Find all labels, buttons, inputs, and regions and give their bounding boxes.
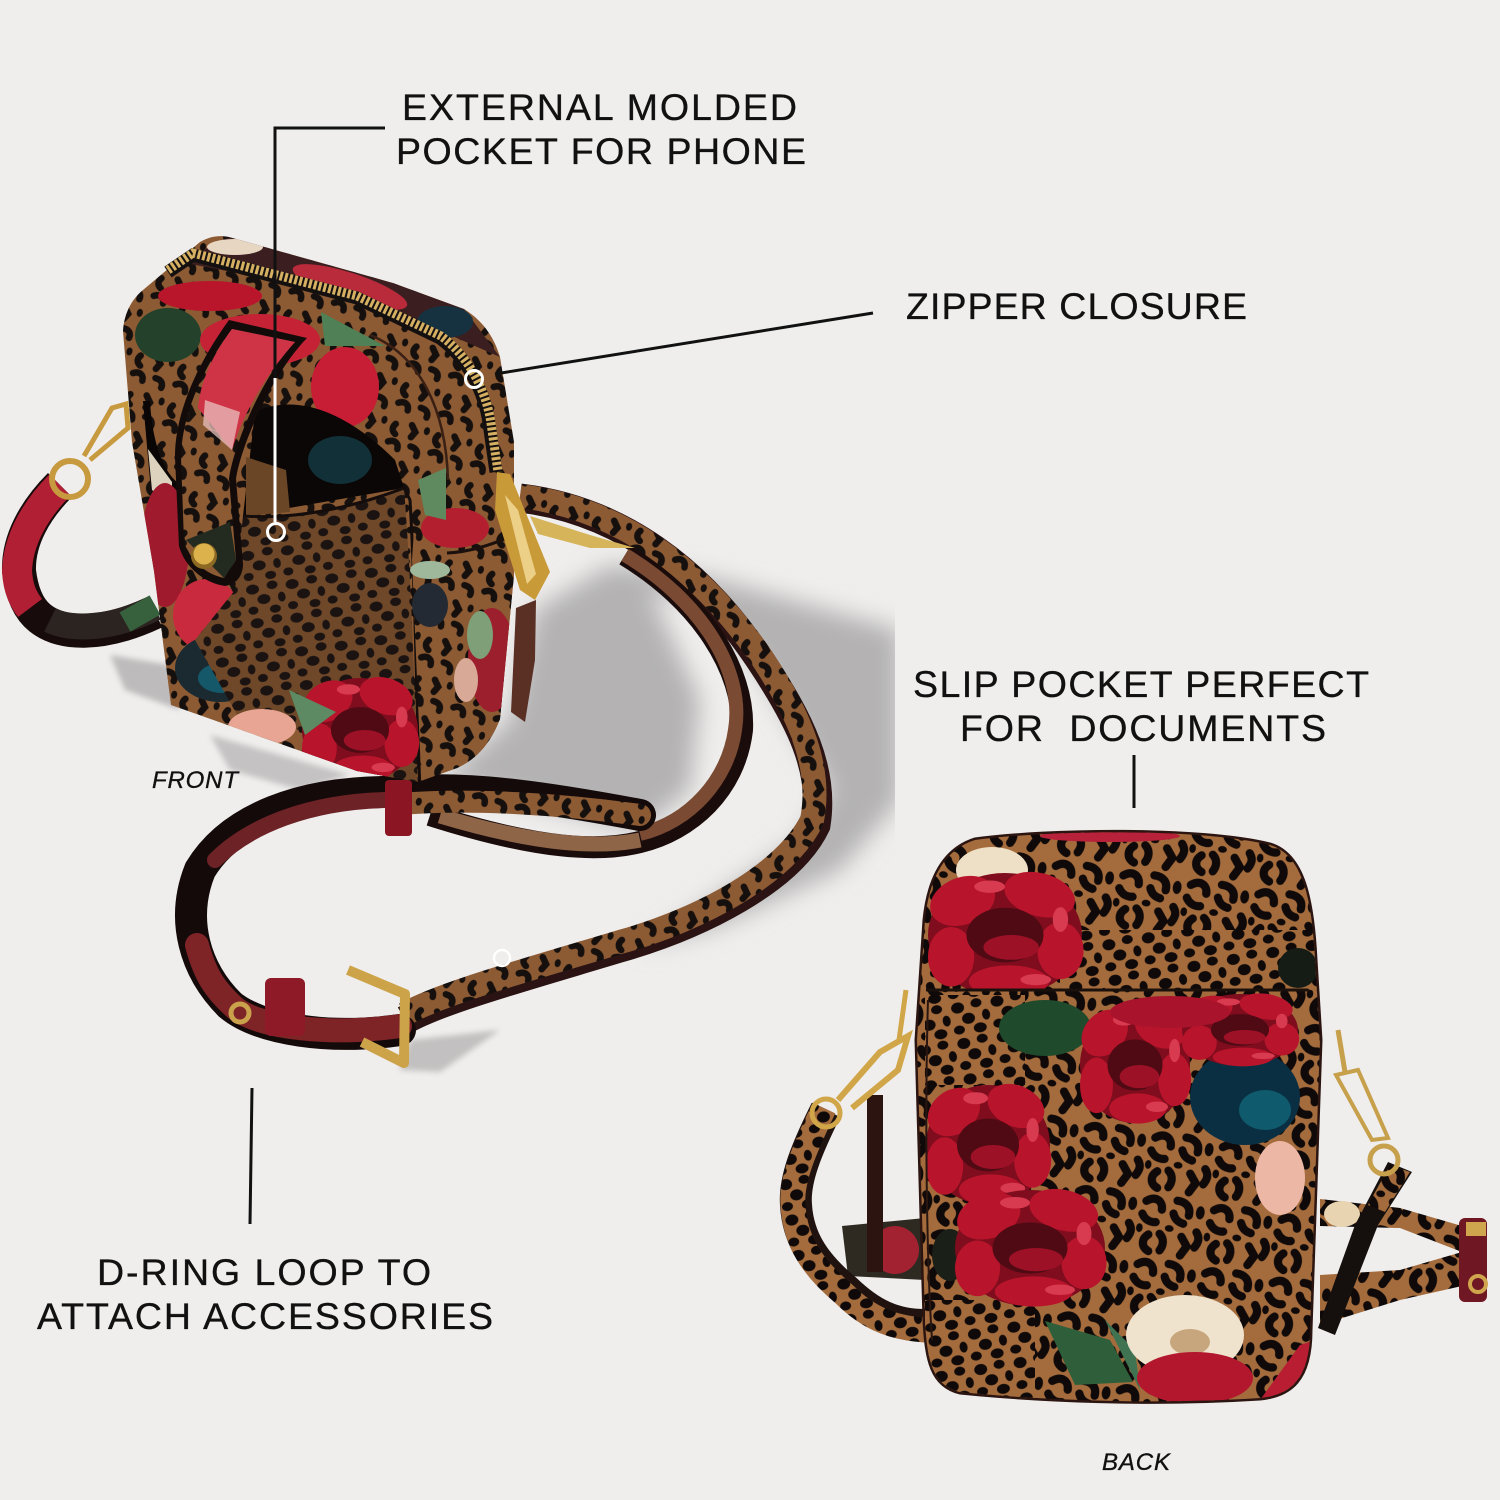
flap strap <box>175 320 307 586</box>
side panel florals <box>370 335 516 780</box>
long strap: lower loop <box>191 790 640 1034</box>
leopard base <box>900 825 1330 1410</box>
back print <box>900 825 1330 1410</box>
label: phone pocket: POCKET FOR PHONE <box>396 130 806 172</box>
body base print <box>123 236 514 781</box>
zipper pull <box>495 472 635 722</box>
back view bag <box>793 825 1487 1410</box>
callout: d-ring loop <box>37 1088 493 1337</box>
zipper <box>168 253 498 472</box>
left shoulder strap <box>793 1095 925 1330</box>
top panel floral <box>180 237 500 357</box>
cream flower bottom <box>1126 1295 1244 1364</box>
top edge red <box>1040 832 1180 842</box>
top right dark leaf <box>1278 948 1318 988</box>
snap button <box>191 543 217 569</box>
callout: zipper closure <box>466 285 1247 388</box>
marker: phone pocket <box>268 524 284 540</box>
label: d-ring: ATTACH ACCESSORIES <box>37 1295 493 1337</box>
callout: external molded pocket for phone <box>268 86 806 540</box>
green leaf by pocket <box>999 1000 1091 1056</box>
caption: back: BACK <box>1102 1449 1171 1476</box>
leader line: zipper <box>495 313 873 374</box>
pink flower <box>1255 1141 1305 1215</box>
teal flower <box>1190 1049 1300 1145</box>
left gold clip <box>52 404 128 497</box>
dark leaf low left <box>932 1229 958 1281</box>
strap keeper loop <box>385 780 412 836</box>
caption: front: FRONT <box>152 767 240 794</box>
label: phone pocket: EXTERNAL MOLDED <box>402 86 797 128</box>
right gold clip <box>1336 1030 1398 1174</box>
top red flower <box>928 872 1084 988</box>
left side cutout <box>143 401 176 490</box>
leader line: d-ring <box>250 1088 252 1224</box>
red flower bottom <box>1137 1340 1315 1404</box>
large red flower <box>918 1075 1107 1307</box>
back body edge <box>917 832 1320 1401</box>
leader line: phone pocket <box>275 128 385 522</box>
open pocket interior <box>243 404 404 516</box>
marker: faint strap point <box>494 950 510 966</box>
long strap: outer strand <box>405 496 818 1020</box>
label: slip pocket: SLIP POCKET PERFECT <box>913 663 1369 705</box>
long strap: inner strand <box>430 555 742 847</box>
lower floral cluster <box>228 677 420 776</box>
pocket flowers <box>1073 988 1300 1124</box>
label: d-ring: D-RING LOOP TO <box>97 1251 431 1293</box>
cream flower top <box>956 847 1028 878</box>
marker: zipper <box>466 370 482 388</box>
label: slip pocket: FOR DOCUMENTS <box>960 707 1326 749</box>
left gold clip <box>812 990 908 1127</box>
front view bag with straps <box>17 225 818 1063</box>
external molded pocket <box>195 488 418 790</box>
bag body <box>123 236 514 782</box>
right shoulder strap <box>1318 1162 1412 1335</box>
buckle <box>231 970 405 1063</box>
cast shadow of front bag and strap <box>110 565 900 1072</box>
left shoulder strap loop <box>17 485 155 631</box>
label: zipper: ZIPPER CLOSURE <box>906 285 1247 327</box>
upper floral band <box>135 281 385 427</box>
back strap behind bag <box>842 1199 1462 1325</box>
lower dark leaves <box>1045 1320 1140 1390</box>
callout: slip pocket <box>913 663 1369 808</box>
side floral bottom <box>144 483 234 702</box>
right buckle <box>1459 1218 1487 1302</box>
leader line: slip pocket <box>1132 755 1136 808</box>
